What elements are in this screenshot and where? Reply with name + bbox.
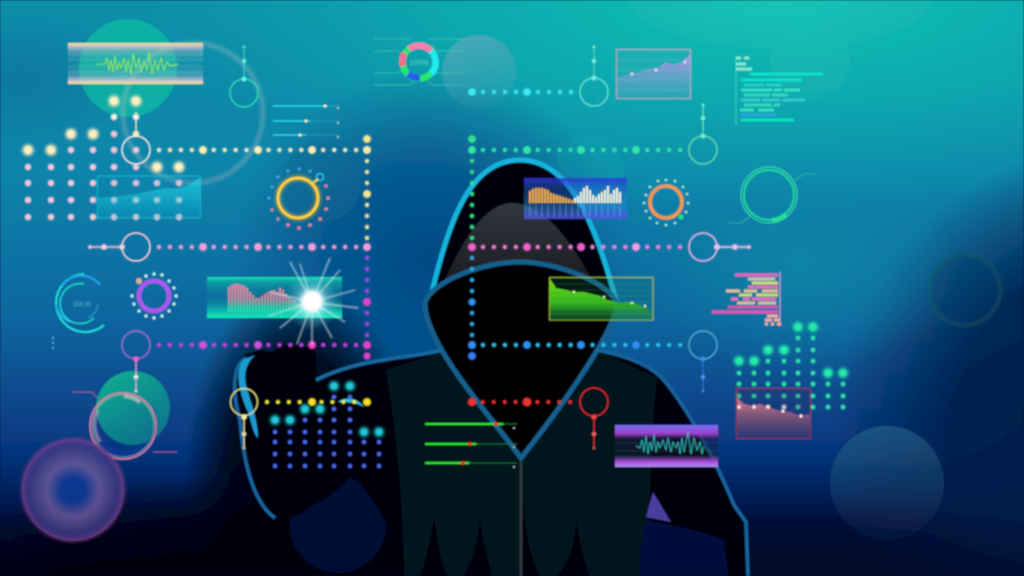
line: green top <box>267 90 367 94</box>
line: purple row 345 <box>159 342 367 348</box>
line: left vertical <box>364 136 370 359</box>
node circle: red <box>580 388 608 449</box>
green double ring <box>728 167 815 223</box>
line: green row 150 <box>468 146 683 154</box>
chart: red area panel <box>736 388 810 438</box>
bokeh: lens flare ring <box>123 43 263 183</box>
hood outer <box>430 160 616 340</box>
line: right vertical <box>468 136 476 360</box>
chart: green pink strip with bars <box>207 277 342 318</box>
sleeve highlight <box>338 399 364 407</box>
chart: purple waveform strip <box>615 425 718 467</box>
bokeh: dark circle behind yellow ring <box>282 142 362 222</box>
chart: green area panel <box>550 278 653 320</box>
cuff highlight <box>239 355 258 438</box>
line: yellow row 402 <box>267 398 370 406</box>
pocket <box>646 492 671 522</box>
hacker figure <box>235 160 748 576</box>
bokeh: green circle top left <box>79 19 177 117</box>
node circle: top left teal <box>230 46 258 107</box>
line: pink row 247 <box>88 244 370 250</box>
orange ring gauge <box>643 179 689 226</box>
chart: waveform strip top left <box>68 43 203 84</box>
lower arm <box>640 520 728 576</box>
dotted HUD lines and circles <box>88 46 750 449</box>
node circle: purple row <box>122 331 150 392</box>
yellow ring gauge <box>267 167 330 230</box>
line: cyan top right <box>468 88 573 96</box>
face opening <box>425 262 616 458</box>
left shoulder outline <box>316 350 443 380</box>
dot grid: blue near hand <box>272 383 382 468</box>
chart: cyan area panel <box>98 176 200 218</box>
bokeh: large purple donut <box>22 439 124 541</box>
purple ring gauge <box>130 272 178 320</box>
line: pink row 247 right <box>468 244 750 250</box>
node circle: blue right <box>689 331 717 392</box>
bokeh: green circle lower left <box>96 371 170 445</box>
donut value: 100% <box>409 58 429 67</box>
node circle: top centre <box>580 78 608 106</box>
slider lines top left <box>273 104 340 138</box>
node circle: yellow hand <box>230 388 258 449</box>
node circle: pink right <box>689 233 717 261</box>
jacket right panel <box>521 350 657 576</box>
bokeh: faint teal circle top right <box>770 22 850 102</box>
chart: purple area top right <box>616 50 690 98</box>
line: yellow row 150 <box>159 146 370 154</box>
arc gauge with value <box>52 274 104 349</box>
node circle: pink row <box>122 233 150 261</box>
bokeh: faint teal circle centre <box>556 134 624 202</box>
bokeh: blue circle lower right <box>830 426 944 540</box>
donut chart 100% <box>374 39 464 85</box>
dot grid: green lower right <box>736 324 846 409</box>
hood grey fold <box>440 203 598 310</box>
node circle: yellow row <box>122 112 150 164</box>
bokeh: faint ring right <box>930 255 1000 325</box>
jacket left panel <box>386 352 521 576</box>
bokeh: grey-blue circle top centre <box>442 35 516 109</box>
body silhouette <box>236 345 748 576</box>
dot grid: top left <box>24 98 182 220</box>
bokeh: dark blue circle by arm <box>290 477 386 573</box>
left hand cuff outline <box>235 358 275 518</box>
bokeh: glass ring lower left <box>72 392 177 459</box>
chart: blue bars over hood <box>524 178 627 219</box>
code block top right <box>736 57 823 125</box>
node circle: green row <box>689 104 717 164</box>
green sliders on chest <box>426 422 517 468</box>
zipper <box>520 462 522 576</box>
gauge value: 158.36 <box>73 302 92 308</box>
line: red row 402 <box>468 398 575 406</box>
line: blue row 345 <box>468 342 683 348</box>
right shoulder and arm outline <box>596 350 748 576</box>
flash burst at fingertip <box>268 258 358 345</box>
node stem: top centre <box>592 46 596 80</box>
code block right pink <box>712 272 781 326</box>
